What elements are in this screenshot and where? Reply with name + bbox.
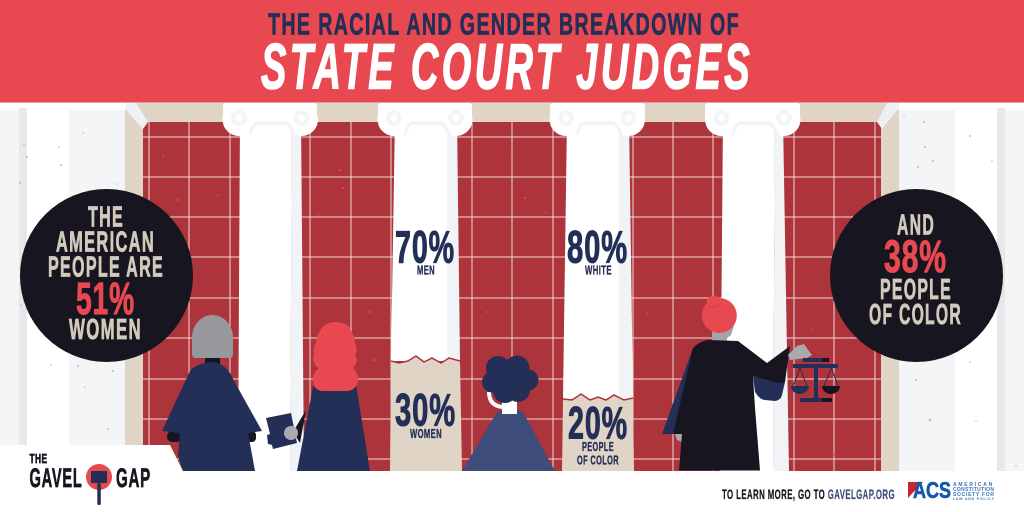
tan entablature and side posts (125, 103, 899, 471)
column 3: 80% white, 20% people of color: 80% (567, 222, 628, 272)
callout: American people 51% women: WOMEN (69, 314, 142, 346)
callout: American people 51% women: 51% (76, 273, 135, 324)
column 2: 70% men, 30% women: 30% (395, 384, 456, 436)
white footer band (0, 445, 1024, 512)
column 3: 80% white, 20% people of color: PEOPLE (582, 439, 614, 454)
judge 1: grey hair, navy robe (162, 315, 262, 471)
header banner (0, 0, 1024, 102)
icon: scales of justice (791, 358, 840, 402)
logo: American Constitution Society: ACS (913, 477, 951, 503)
logo: The Gavel Gap (30, 451, 151, 505)
column 2: 70% men, 30% women: WOMEN (410, 426, 442, 441)
courthouse wall background (0, 102, 1024, 471)
logo: The Gavel Gap: THE (30, 451, 48, 466)
column 3: 80% white, 20% people of color: 20% (568, 398, 628, 448)
callout: and 38% people of color: PEOPLE (880, 274, 952, 306)
column 3: 80% white, 20% people of color: OF COLOR (577, 452, 619, 468)
brick back wall (143, 122, 881, 471)
callout: American people 51% women: PEOPLE ARE (48, 252, 164, 284)
logo: American Constitution Society: AMERICAN (953, 482, 993, 488)
judge 3: curly hair, blue robe (462, 356, 555, 471)
judge 2: red hair, navy robe, holding a book (266, 322, 370, 471)
logo: American Constitution Society: SOCIETY FOR (953, 492, 994, 498)
callout: American people 51% women: AMERICAN (56, 226, 155, 258)
callout: and 38% people of color (830, 189, 1003, 362)
logo: The Gavel Gap: GAP (116, 463, 151, 493)
footer call to action: TO LEARN MORE, GO TO GAVELGAP.ORG (722, 486, 895, 502)
column 2: 70% men, 30% women: MEN (417, 262, 435, 278)
callout: and 38% people of color: 38% (884, 231, 947, 282)
logo: American Constitution Society: LAW AND POLICY (953, 497, 995, 501)
logo: American Constitution Society (908, 477, 995, 503)
judge 4: red hair, black robe, holding scales (662, 296, 812, 470)
column 2: 70% men, 30% women: 70% (395, 222, 455, 272)
title: line 1: THE RACIAL AND GENDER BREAKDOWN OF (268, 6, 740, 42)
column 4 (705, 103, 800, 471)
callout: American people 51% women (20, 189, 193, 362)
column 2: 70% men, 30% women (378, 103, 472, 471)
column 3: 80% white, 20% people of color (550, 103, 645, 471)
logo: The Gavel Gap: GAVEL (30, 463, 82, 493)
logo: American Constitution Society: CONSTITUTION (953, 487, 994, 493)
column 1 (222, 103, 318, 471)
column 3: 80% white, 20% people of color: WHITE (585, 262, 612, 278)
callout: American people 51% women: THE (88, 202, 124, 234)
callout: and 38% people of color: AND (897, 210, 935, 242)
